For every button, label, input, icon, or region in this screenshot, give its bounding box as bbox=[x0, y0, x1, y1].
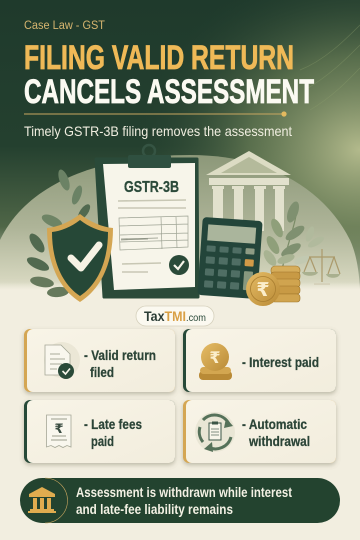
icon: plant left bbox=[25, 168, 92, 298]
label: - Valid return bbox=[84, 347, 156, 363]
icon: rupee coin bbox=[246, 272, 280, 306]
label: paid bbox=[91, 433, 114, 449]
label: - Interest paid bbox=[242, 354, 319, 370]
icon: document check bbox=[44, 342, 80, 379]
panel: late fees paid bbox=[24, 400, 175, 463]
title rule bbox=[24, 111, 287, 117]
callout: conclusion banner bbox=[20, 478, 340, 523]
subtitle: Timely GSTR-3B filing removes the assessment bbox=[24, 123, 292, 139]
icon: cycle clipboard bbox=[195, 412, 235, 452]
logo: TaxTMI.com bbox=[136, 306, 214, 326]
icon: receipt bbox=[46, 415, 71, 448]
label: - Late fees bbox=[84, 416, 142, 432]
banner text: Assessment is withdrawn while interest bbox=[76, 485, 292, 500]
label: withdrawal bbox=[248, 433, 310, 449]
title bbox=[24, 39, 314, 111]
icon: shield bbox=[47, 214, 113, 302]
banner text: and late-fee liability remains bbox=[76, 502, 233, 517]
icon: calculator bbox=[197, 217, 263, 299]
icon: plant right bbox=[261, 200, 326, 270]
icon: rupee coin on base: ₹ bbox=[209, 348, 221, 367]
icon: receipt: ₹ bbox=[54, 422, 64, 437]
icon: scales bbox=[302, 249, 340, 284]
check badge bbox=[169, 255, 189, 275]
icon: rupee coin on base bbox=[199, 343, 232, 380]
form title: GSTR-3B bbox=[124, 179, 179, 196]
icon: clipboard GSTR-3B bbox=[96, 145, 198, 297]
panel: valid return filed bbox=[24, 329, 175, 392]
icon: courthouse bbox=[206, 151, 291, 231]
icon: bank bbox=[28, 478, 68, 523]
icon: coin stack bbox=[271, 266, 300, 302]
logo: TaxTMI.com: TaxTMI.com bbox=[144, 309, 206, 324]
icon: rupee coin: ₹ bbox=[256, 279, 270, 301]
kicker: Case Law - GST bbox=[24, 20, 105, 32]
panel: automatic withdrawal bbox=[183, 400, 336, 463]
panel: interest paid bbox=[183, 329, 336, 392]
label: filed bbox=[90, 364, 114, 380]
label: - Automatic bbox=[242, 416, 307, 432]
